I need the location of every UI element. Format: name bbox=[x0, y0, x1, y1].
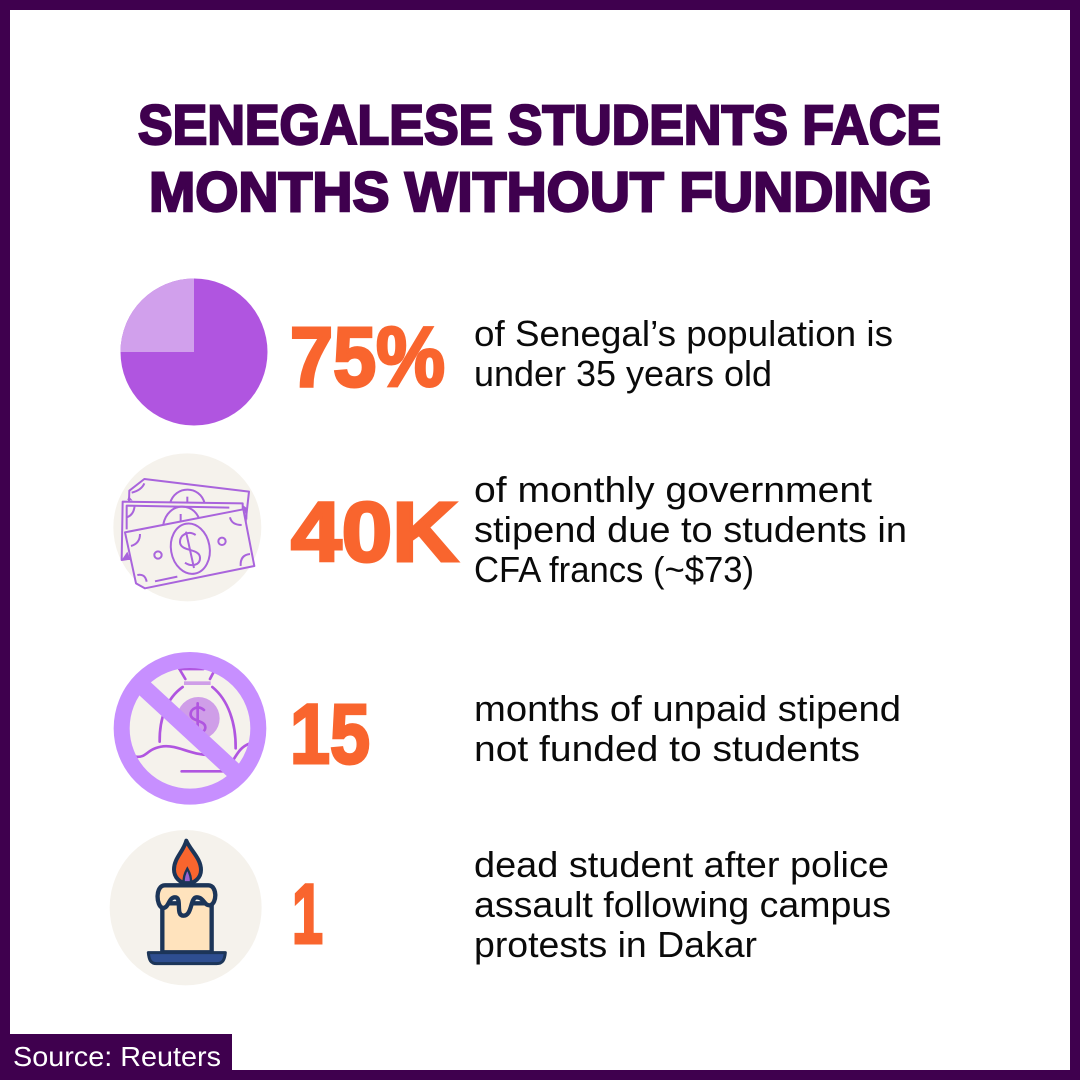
title: SENEGALESE STUDENTS FACE bbox=[138, 93, 941, 156]
panel: unpaid months statistic bbox=[122, 660, 901, 797]
text: student death description: assault following campus bbox=[474, 884, 891, 925]
icon: candle bbox=[110, 830, 262, 985]
number: 40K: 40K bbox=[291, 485, 458, 579]
icon: crossed out money bag bbox=[122, 660, 258, 797]
text: unpaid months description: months of unpaid stipend bbox=[474, 688, 901, 729]
panel: stipend statistic bbox=[113, 453, 907, 601]
source label bbox=[0, 1034, 232, 1080]
panel: student death statistic bbox=[110, 830, 891, 985]
number: 1: 1 bbox=[292, 867, 323, 961]
text: population description bbox=[474, 313, 893, 394]
text: stipend description: CFA francs (~$73) bbox=[474, 549, 754, 590]
text: student death description: protests in Dakar bbox=[474, 924, 757, 965]
source label: Source: Reuters bbox=[13, 1041, 221, 1072]
title bbox=[138, 93, 941, 223]
icon: pie chart 75 percent bbox=[120, 278, 268, 426]
text: unpaid months description: not funded to students bbox=[474, 728, 860, 769]
text: student death description bbox=[474, 844, 891, 965]
text: student death description: dead student after police bbox=[474, 844, 889, 885]
icon: banknotes bbox=[113, 453, 261, 601]
text: stipend description: stipend due to students in bbox=[474, 509, 907, 550]
text: stipend description: of monthly government bbox=[474, 469, 872, 510]
panel: population statistic bbox=[120, 278, 893, 426]
text: unpaid months description bbox=[474, 688, 901, 769]
text: population description: under 35 years old bbox=[474, 353, 772, 394]
text: population description: of Senegal’s population is bbox=[474, 313, 893, 354]
number: 75%: 75% bbox=[290, 310, 445, 404]
number: 15: 15 bbox=[290, 687, 370, 781]
text: stipend description bbox=[474, 469, 907, 590]
title: MONTHS WITHOUT FUNDING bbox=[149, 160, 932, 223]
